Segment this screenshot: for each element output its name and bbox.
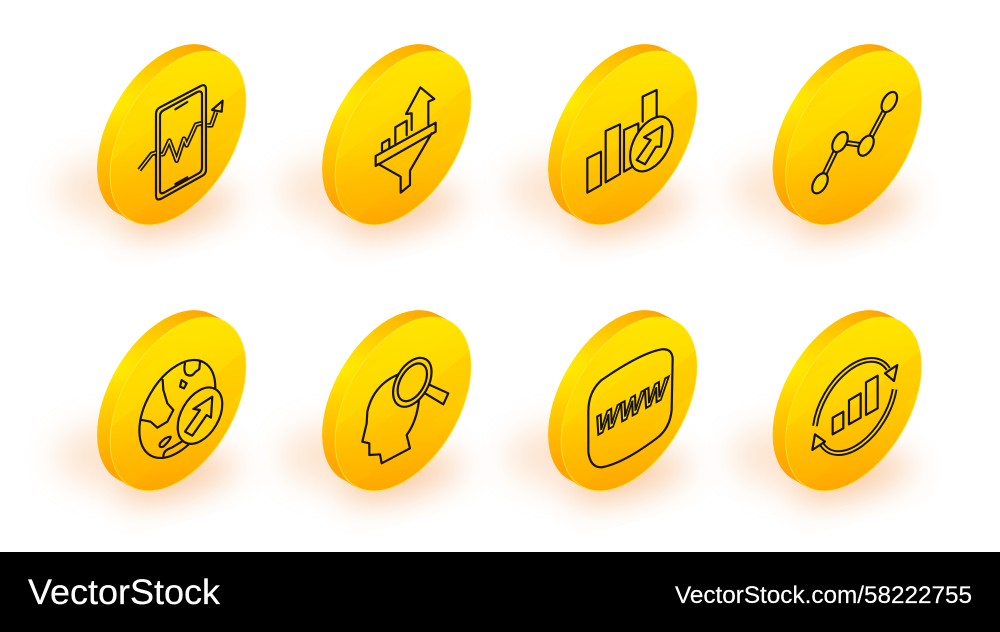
icon: cycle bars: [812, 360, 897, 453]
coin: www web address: [506, 287, 725, 514]
icon: line graph nodes: [809, 89, 900, 196]
coin: head with magnifying glass: [280, 287, 499, 514]
logo text: VectorStock: [28, 572, 220, 612]
image id text: VectorStock.com/58222755: [675, 582, 972, 609]
icon: www badge: [588, 349, 673, 467]
icon: smartphone chart: [139, 85, 223, 199]
icon: bars and arrow badge: [587, 90, 681, 193]
icon: funnel: [376, 87, 436, 193]
coin: globe with up arrow: [55, 287, 274, 514]
coin: sales funnel with growth arrow: [280, 21, 499, 248]
coin: smartphone with stock chart: [55, 21, 274, 248]
icon: globe: [124, 347, 231, 471]
coin: refresh arrows around bars: [730, 287, 949, 514]
coin: bar chart with up arrow: [506, 21, 725, 248]
icon: www badge: WWW: [595, 371, 669, 443]
coin: connected line graph: [730, 21, 949, 248]
icon: head search: [362, 351, 448, 463]
footer band: [0, 552, 1000, 632]
